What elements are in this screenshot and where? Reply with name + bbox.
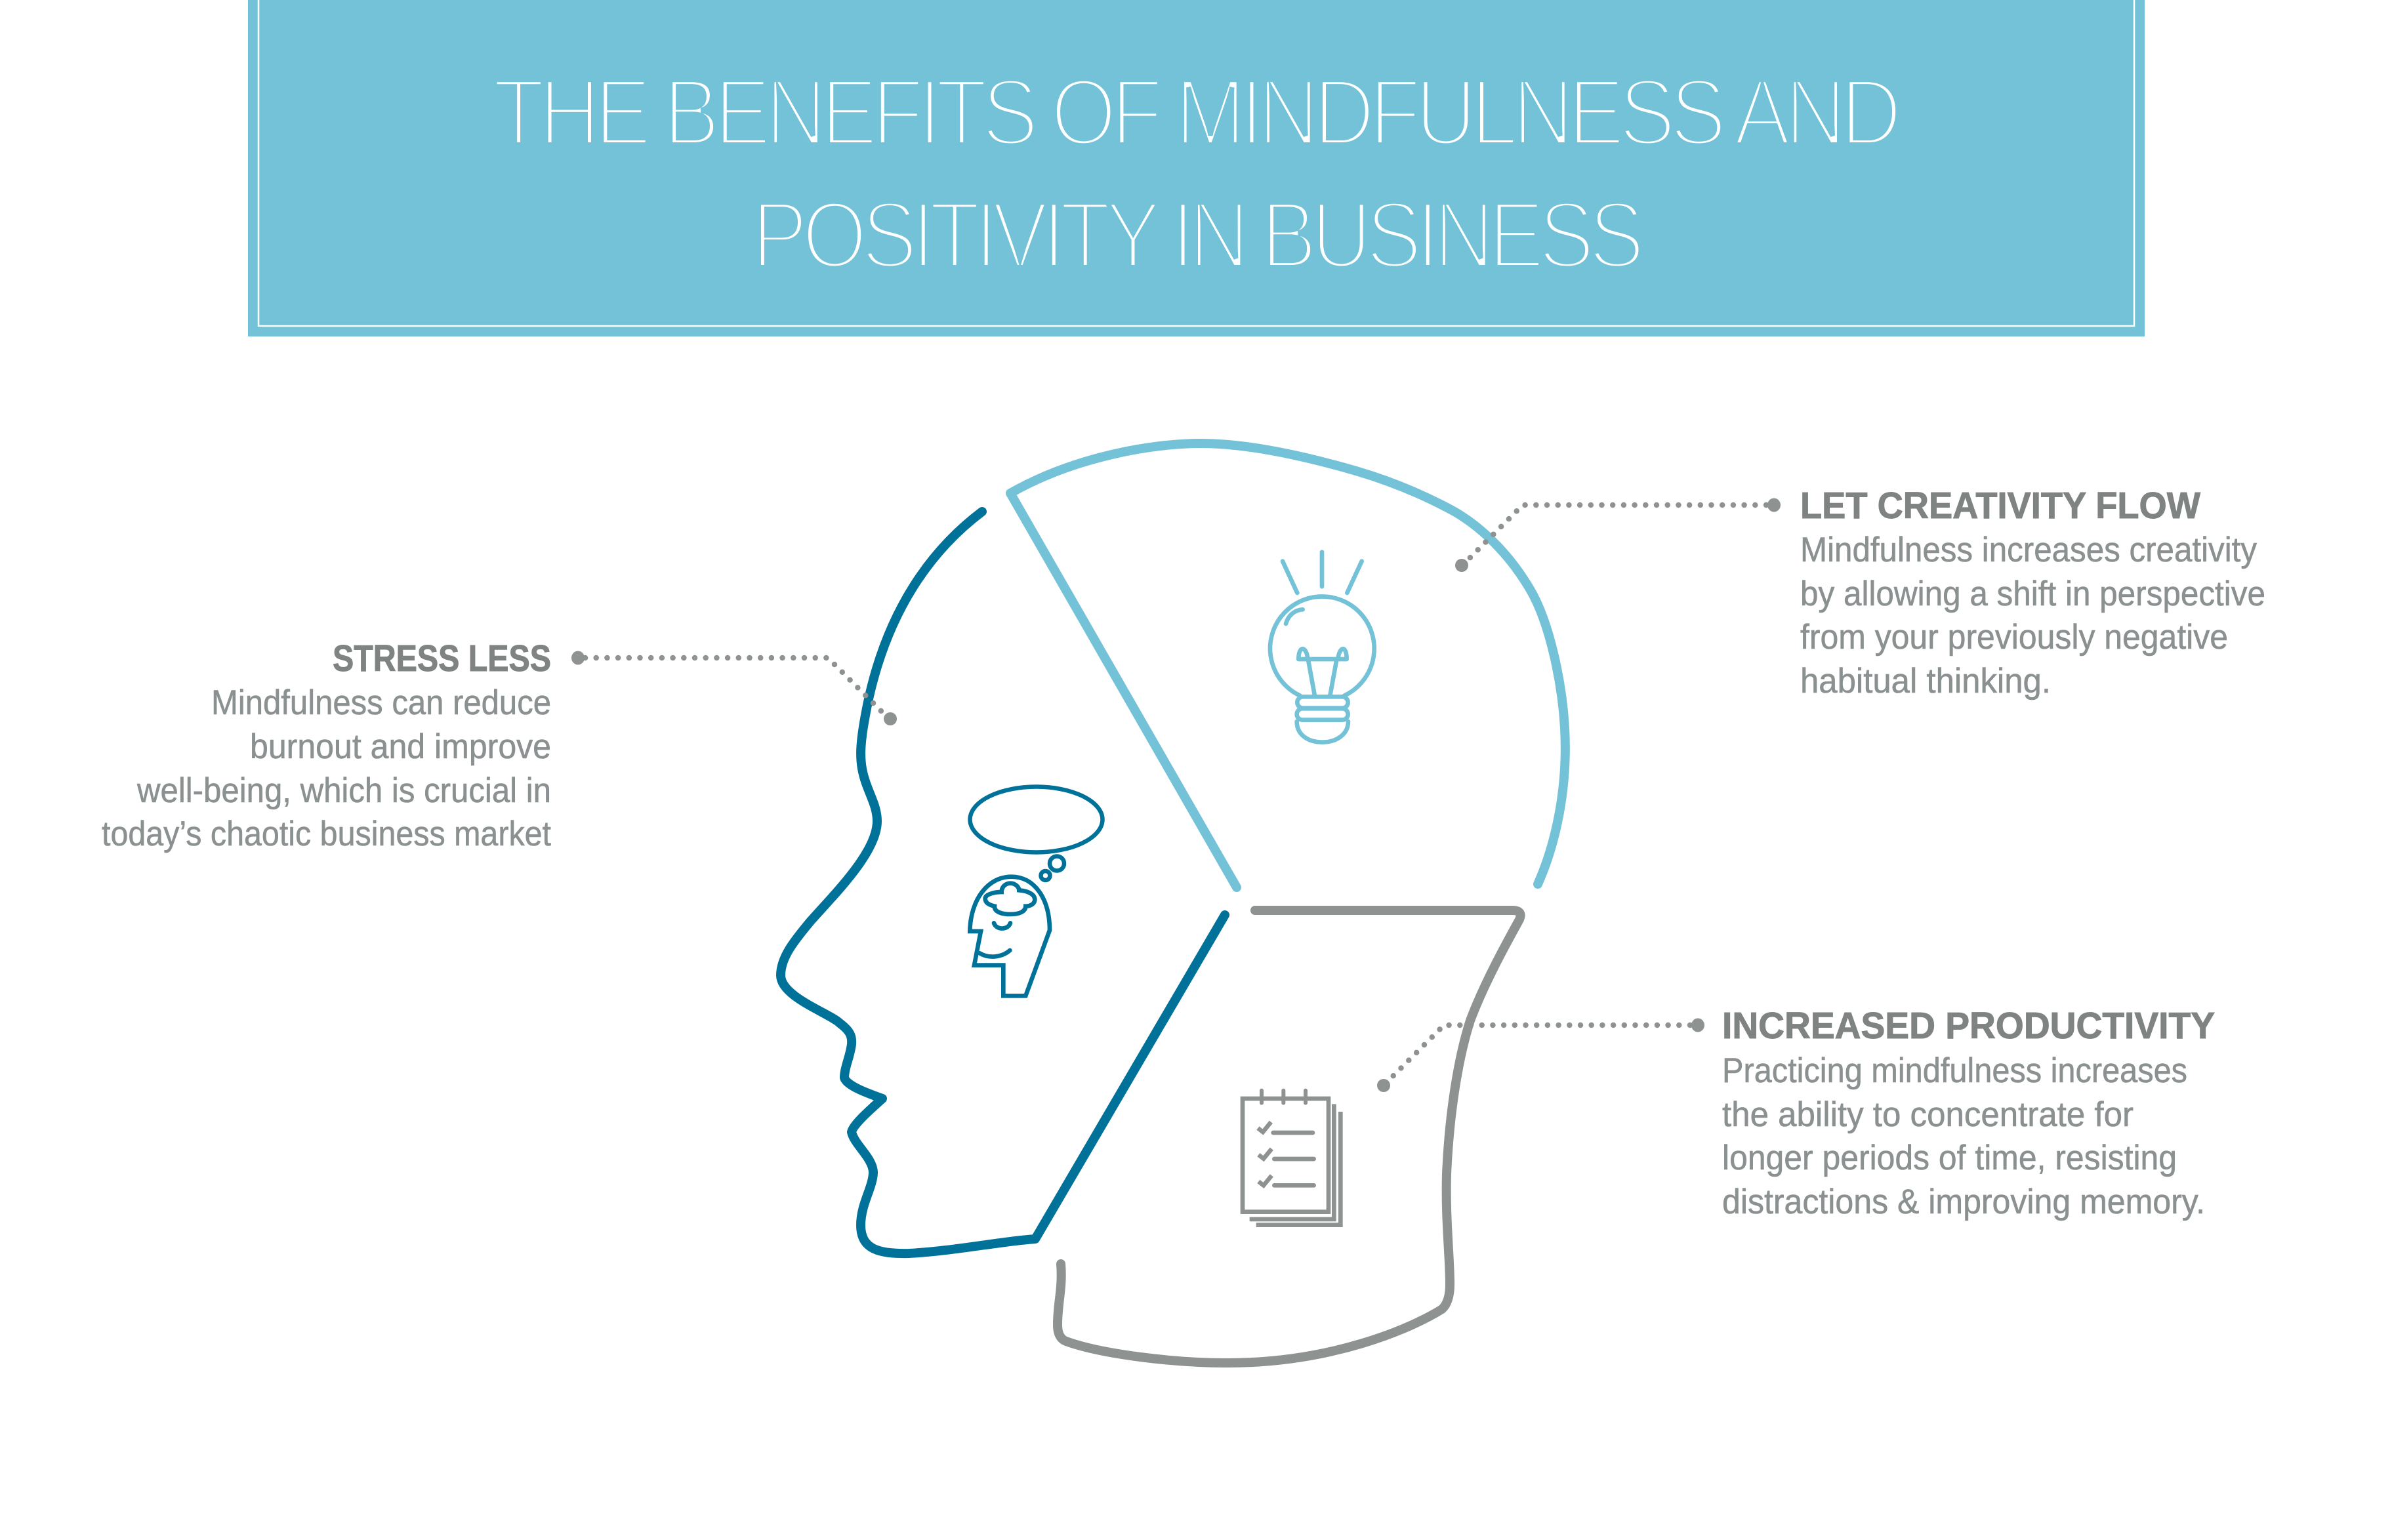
title xyxy=(493,59,1898,288)
text block: let creativity flow: from your previously negative xyxy=(1800,618,2228,657)
head outline: face segment xyxy=(781,512,1225,1253)
title: THE BENEFITS OF MINDFULNESS AND xyxy=(493,59,1898,165)
text block: stress less: today’s chaotic business market xyxy=(102,815,551,853)
callout leader: creativity xyxy=(1455,498,1781,572)
text block: let creativity flow xyxy=(1800,485,2265,700)
text block: let creativity flow: LET CREATIVITY FLOW xyxy=(1800,485,2200,527)
text block: stress less xyxy=(102,638,551,853)
text block: stress less: burnout and improve xyxy=(250,727,551,766)
callout leader: stress less xyxy=(571,651,897,725)
text block: increased productivity xyxy=(1722,1005,2215,1221)
text block: increased productivity: longer periods of time, resisting xyxy=(1722,1139,2177,1177)
text block: let creativity flow: by allowing a shift in perspective xyxy=(1800,575,2265,613)
callout leader: productivity xyxy=(1377,1018,1704,1092)
text block: increased productivity: the ability to concentrate for xyxy=(1722,1095,2134,1134)
text block: let creativity flow: Mindfulness increases creativity xyxy=(1800,531,2257,569)
text block: increased productivity: Practicing mindfulness increases xyxy=(1722,1051,2187,1090)
head outline: crown segment xyxy=(1010,443,1565,887)
head outline: neck segment xyxy=(1058,910,1521,1363)
title: POSITIVITY IN BUSINESS xyxy=(752,182,1641,288)
icon: light bulb xyxy=(1270,552,1374,742)
text block: increased productivity: distractions & improving memory. xyxy=(1722,1183,2205,1221)
title banner xyxy=(248,0,2145,336)
text block: increased productivity: INCREASED PRODUCTIVITY xyxy=(1722,1005,2215,1047)
text block: let creativity flow: habitual thinking. xyxy=(1800,662,2051,700)
text block: stress less: STRESS LESS xyxy=(333,638,551,679)
text block: stress less: well-being, which is crucial in xyxy=(136,771,551,810)
icon: checklist notepad xyxy=(1243,1091,1340,1225)
text block: stress less: Mindfulness can reduce xyxy=(211,683,551,722)
icon: head with thought bubble xyxy=(970,787,1102,996)
